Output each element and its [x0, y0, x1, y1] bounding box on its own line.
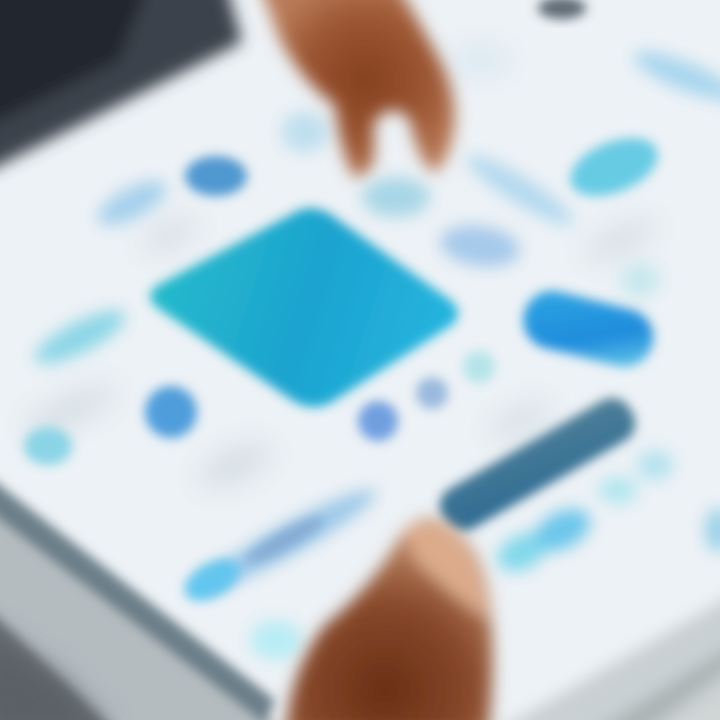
- shape: long blue stripe lower middle: [193, 478, 383, 602]
- shape: top right pale stripe: [629, 42, 720, 110]
- laptop: dark corner: [0, 0, 242, 175]
- shape: teal stripe left: [29, 301, 131, 373]
- shape: small blue oval upper left: [185, 156, 247, 196]
- hand: bottom, reaching up: [285, 519, 493, 720]
- shape: chip held by hand: [362, 177, 430, 217]
- shape: blue pill right: [517, 285, 659, 373]
- shape: top right dark blob: [538, 0, 586, 19]
- main diamond: [150, 208, 458, 407]
- table edge bottom right: [490, 590, 720, 720]
- shape: edge blob right: [705, 508, 720, 552]
- table edge bottom-left: [0, 470, 280, 720]
- hand: top, reaching down: [258, 0, 455, 177]
- shape: pale stripe upper left: [91, 172, 173, 234]
- shape: dark blue bar: [432, 391, 642, 539]
- shape: pale oval: [438, 221, 522, 271]
- shape: small blue dots: [358, 351, 495, 441]
- shape: faint oval: [281, 112, 329, 152]
- faint paper marks: [19, 48, 661, 496]
- shape: teal blobs lower right: [491, 450, 673, 579]
- shape: teal circle: [24, 427, 72, 465]
- shape: upper right teal blob: [562, 127, 666, 207]
- shape: blue circle: [145, 386, 197, 438]
- shape: diagonal pale stripe: [461, 146, 579, 234]
- shape: bright end of stripe: [178, 510, 329, 609]
- shape: faint teal dot right: [620, 262, 660, 298]
- table edge bottom-left dark gradient: [0, 625, 110, 720]
- shape: faint teal lower: [250, 620, 302, 660]
